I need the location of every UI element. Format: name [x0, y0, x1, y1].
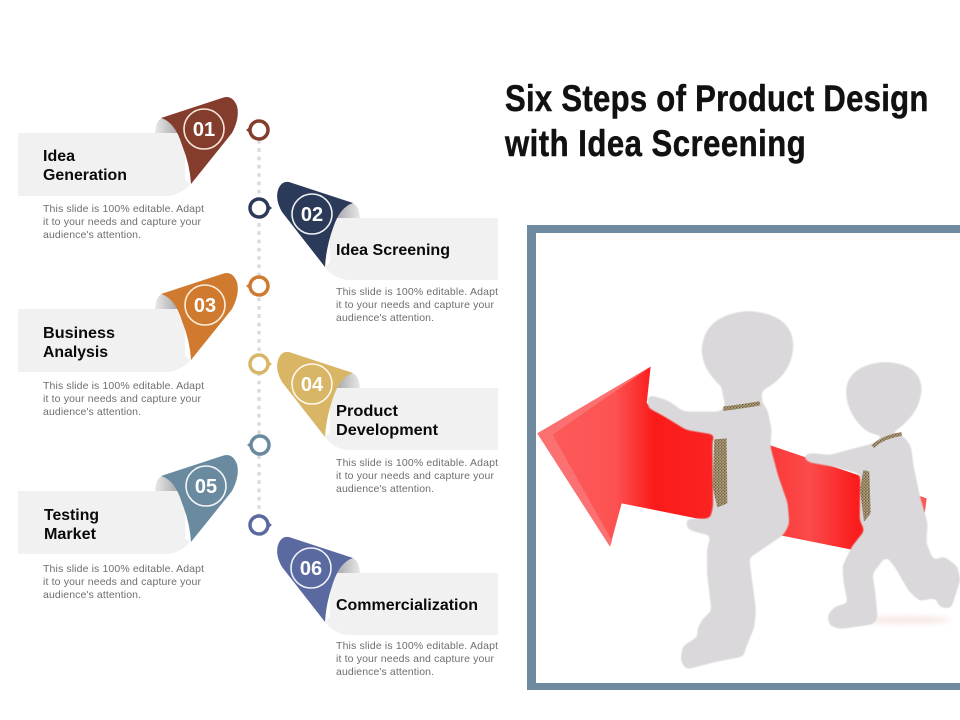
connector ring 04: [250, 355, 272, 373]
card 01: [18, 133, 190, 196]
tie: rear man: [860, 434, 902, 522]
heading 06: Commercialization: [336, 597, 478, 614]
number badge 04: [292, 364, 332, 404]
ribbon 01: [155, 97, 238, 184]
heading 01: [43, 148, 127, 184]
description 05: it to your needs and capture your: [43, 576, 202, 588]
heading 01: Generation: [43, 167, 127, 184]
description 01: it to your needs and capture your: [43, 216, 202, 228]
panel: step 03 Business Analysis: [18, 273, 268, 418]
panel: step 06 Commercialization: [250, 516, 498, 678]
heading 03: Analysis: [43, 344, 108, 361]
picture frame: [527, 225, 960, 690]
connector ring 06: [250, 516, 272, 534]
panel: step 04 Product Development: [250, 352, 498, 495]
number badge 03: 03: [194, 295, 216, 317]
heading 04: Product: [336, 403, 399, 420]
heading 02: Idea Screening: [336, 242, 450, 259]
heading 03: Business: [43, 325, 115, 342]
panel: step 05 Testing Market: [18, 436, 269, 601]
title: Six Steps of Product Design: [505, 79, 928, 120]
number badge 01: 01: [193, 119, 215, 141]
figure: rear man: [805, 362, 959, 627]
description 04: audience's attention.: [336, 483, 434, 495]
description 05: audience's attention.: [43, 589, 141, 601]
title: with Idea Screening: [504, 124, 806, 165]
ribbon 05: [155, 455, 238, 542]
number badge 04: 04: [301, 374, 324, 396]
heading 04: [336, 403, 439, 439]
figure: front man: [649, 311, 793, 668]
card 05: [18, 491, 190, 554]
heading 01: Idea: [43, 148, 75, 165]
panel: step 02 Idea Screening: [250, 182, 498, 324]
ribbon 02: [277, 182, 360, 267]
heading 05: Testing: [44, 507, 99, 524]
number badge 02: 02: [301, 204, 323, 226]
timeline dotted line: [257, 140, 261, 520]
connector ring 03: [246, 277, 268, 295]
description 04: [336, 457, 498, 495]
description 01: [43, 203, 204, 241]
description 06: audience's attention.: [336, 666, 434, 678]
connector ring 05: [247, 436, 269, 454]
ribbon 06: [277, 537, 360, 622]
number badge 03: [185, 285, 225, 325]
number badge 06: [291, 548, 331, 588]
ribbon 03: [155, 273, 238, 360]
ground shadow: [863, 616, 950, 624]
illustration: two figures carrying a red arrow: [537, 311, 959, 668]
description 02: it to your needs and capture your: [336, 299, 494, 311]
description 01: This slide is 100% editable. Adapt: [43, 203, 204, 215]
title: [504, 79, 928, 165]
heading 05: Market: [44, 526, 97, 543]
card 06: [325, 573, 498, 635]
description 04: This slide is 100% editable. Adapt: [336, 457, 498, 469]
panel: step 01 Idea Generation: [18, 97, 268, 241]
connector ring 02: [250, 199, 272, 217]
number badge 06: 06: [300, 558, 322, 580]
heading 04: Development: [336, 422, 439, 439]
heading 03: [43, 325, 115, 361]
description 01: audience's attention.: [43, 229, 141, 241]
description 02: audience's attention.: [336, 312, 434, 324]
ribbon 04: [277, 352, 360, 437]
number badge 05: [186, 466, 226, 506]
tie: front man: [713, 403, 760, 507]
description 06: This slide is 100% editable. Adapt: [336, 640, 498, 652]
description 03: [43, 380, 204, 418]
description 03: it to your needs and capture your: [43, 393, 202, 405]
number badge 02: [292, 194, 332, 234]
description 06: it to your needs and capture your: [336, 653, 494, 665]
description 02: This slide is 100% editable. Adapt: [336, 286, 498, 298]
description 05: This slide is 100% editable. Adapt: [43, 563, 204, 575]
card 04: [325, 388, 498, 450]
connector ring 01: [246, 121, 268, 139]
description 03: audience's attention.: [43, 406, 141, 418]
description 03: This slide is 100% editable. Adapt: [43, 380, 204, 392]
number badge 05: 05: [195, 476, 217, 498]
heading 05: [44, 507, 99, 543]
number badge 01: [184, 109, 224, 149]
red arrow: [537, 367, 927, 558]
card 03: [18, 309, 190, 372]
description 04: it to your needs and capture your: [336, 470, 494, 482]
description 02: [336, 286, 498, 324]
description 05: [43, 563, 204, 601]
card 02: [325, 218, 498, 280]
description 06: [336, 640, 498, 678]
